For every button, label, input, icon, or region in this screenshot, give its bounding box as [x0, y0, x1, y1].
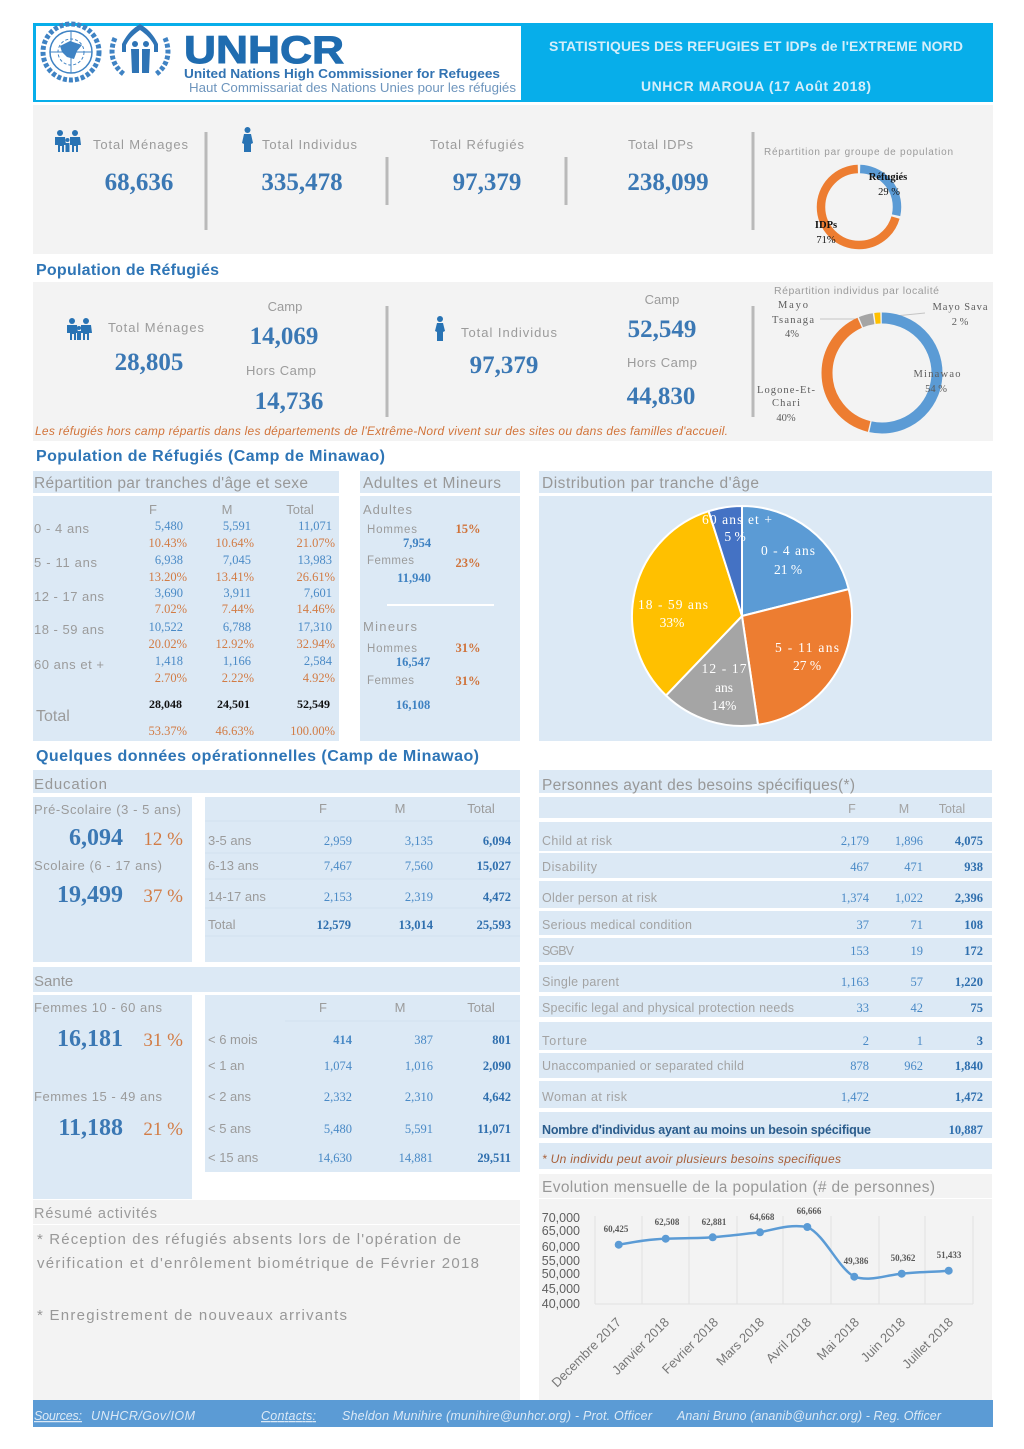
panel: adults and minors: 16,547 — [396, 655, 430, 669]
table: education by age: 13,014 — [399, 918, 434, 932]
table: children by age: 14,630 — [318, 1151, 352, 1165]
row: 60 and over: 2.22% — [222, 671, 254, 685]
row: 5-11 years: 26.61% — [296, 570, 335, 584]
panel: adults and minors: 31% — [456, 674, 480, 688]
table: children by age: 1,016 — [405, 1059, 433, 1073]
table rows: needs by type: 962 — [904, 1059, 923, 1073]
table: children by age: M — [395, 1000, 405, 1015]
panel: education: Education — [34, 776, 107, 793]
data labels: 62,508 — [655, 1217, 680, 1227]
data labels: 60,425 — [604, 1224, 629, 1234]
donut chart: population groups: IDPs — [815, 220, 837, 231]
row: 18-59 years: 18 - 59 ans — [34, 622, 104, 637]
stat: total households: Total Ménages — [93, 137, 188, 152]
data labels — [604, 1206, 962, 1266]
pie chart — [632, 506, 852, 726]
table rows: needs by type: 57 — [910, 975, 923, 989]
donut chart: by locality: 2 % — [952, 317, 969, 328]
data labels: 49,386 — [844, 1256, 869, 1266]
row: total: 53.37% — [148, 724, 187, 738]
table rows: needs by type: Torture — [542, 1034, 587, 1048]
row: 0-4 years: 10.43% — [148, 536, 187, 550]
y axis labels: 65,000 — [542, 1224, 580, 1238]
footer: sources and contacts: Anani Bruno (ananib@unhcr.org) - Reg. Officer — [676, 1409, 942, 1423]
icon: household — [67, 318, 92, 340]
panel: adults and minors: Mineurs — [363, 619, 418, 634]
table rows: needs by type: Disability — [542, 860, 598, 874]
table: children by age: 2,090 — [483, 1059, 511, 1073]
donut chart: by locality — [757, 285, 988, 428]
table rows: needs by type: Specific legal and physical protection needs — [542, 1001, 794, 1015]
stat: women 15-49: 21 % — [143, 1119, 183, 1140]
row: 0-4 years: 0 - 4 ans — [34, 521, 90, 536]
table: education by age: 4,472 — [483, 890, 511, 904]
data labels: 64,668 — [750, 1212, 775, 1222]
table rows: needs by type: 1,472 — [841, 1090, 869, 1104]
panel: age distribution pie: 18 - 59 ans — [638, 597, 708, 612]
table: children by age: < 2 ans — [208, 1089, 252, 1104]
header banner — [33, 23, 993, 102]
logo wordmark — [184, 29, 516, 95]
panel: activities summary: Résumé activités — [34, 1206, 157, 1222]
table rows: needs by type: 108 — [964, 918, 983, 932]
donut chart: population groups — [764, 147, 953, 246]
table: education by age: 6-13 ans — [208, 858, 259, 873]
donut chart: population groups: 29 % — [878, 187, 900, 198]
table rows: needs by type: 2,179 — [841, 834, 869, 848]
row: 18-59 years: 6,788 — [223, 620, 251, 634]
stat: total individuals: Total Individus — [262, 137, 358, 152]
donut chart: by locality: Répartition individus par localité — [774, 285, 939, 297]
row: total: 28,048 — [149, 697, 182, 711]
donut chart: population groups: 71% — [816, 235, 836, 246]
row: 0-4 years: 5,480 — [155, 519, 183, 533]
x axis labels: Decembre 2017 — [548, 1315, 624, 1390]
stat: refugee households: 14,069 — [250, 323, 318, 350]
panel: adults and minors: Adultes et Mineurs — [363, 475, 501, 492]
x axis labels — [548, 1315, 956, 1390]
table rows: needs by type: 42 — [910, 1001, 923, 1015]
row: 5-11 years: 5 - 11 ans — [34, 555, 98, 570]
table: children by age: Total — [467, 1000, 495, 1015]
table rows: needs by type: 1 — [917, 1034, 923, 1048]
panel: age distribution pie: 21 % — [774, 562, 802, 577]
table rows: needs by type: Single parent — [542, 975, 620, 989]
panel: activities summary — [33, 1200, 520, 1400]
donut chart: by locality: Mayo — [778, 300, 808, 311]
table rows: needs by type: 467 — [850, 860, 869, 874]
x axis labels: Juillet 2018 — [899, 1315, 956, 1372]
row: 60 and over: 4.92% — [303, 671, 335, 685]
row: 5-11 years: 7,045 — [223, 553, 251, 567]
row: total: 100.00% — [290, 724, 335, 738]
stat: school age: Scolaire (6 - 17 ans) — [34, 858, 162, 873]
data line — [615, 1223, 953, 1281]
panel: adults and minors: Adultes — [363, 502, 412, 517]
panel: age and sex table — [33, 471, 339, 741]
data labels: 51,433 — [937, 1250, 962, 1260]
stat: pre-school: Pré-Scolaire (3 - 5 ans) — [34, 802, 181, 817]
panel: age and sex table: M — [222, 502, 232, 517]
panel: age distribution pie: ans — [715, 680, 733, 695]
panel: adults and minors: 11,940 — [397, 571, 431, 585]
table: education by age: Total — [208, 917, 236, 932]
donut chart: by locality: Mayo Sava — [932, 302, 988, 313]
panel: age distribution pie: 14% — [712, 698, 736, 713]
donut chart: by locality: Minawao — [914, 369, 960, 380]
panel: age distribution pie: 5 % — [724, 529, 746, 544]
x axis labels: Mars 2018 — [713, 1315, 767, 1369]
data labels: 66,666 — [797, 1206, 822, 1216]
note: out-of-camp refugees: Les réfugiés hors camp répartis dans les départements de l'Extrême-Nord vivent sur des sites ou dans des familles d'accueil. — [35, 424, 728, 438]
donut chart: by locality: Chari — [772, 398, 800, 409]
table: children by age: < 15 ans — [208, 1150, 259, 1165]
icon: person — [435, 316, 445, 341]
stat: refugee households: Camp — [268, 299, 302, 314]
table: children by age: 11,071 — [477, 1122, 511, 1136]
stat: refugee individuals: Camp — [645, 292, 679, 307]
row: 0-4 years: 11,071 — [298, 519, 332, 533]
table rows: needs by type: 878 — [850, 1059, 869, 1073]
panel: activities summary: * Enregistrement de nouveaux arrivants — [37, 1307, 347, 1324]
panel: age distribution pie — [539, 471, 992, 741]
panel: monthly population line chart — [539, 1174, 992, 1400]
y axis labels: 40,000 — [542, 1297, 580, 1311]
panel: adults and minors — [360, 471, 520, 741]
stat: total IDPs — [627, 137, 709, 196]
row: 18-59 years: 20.02% — [148, 637, 187, 651]
row: 60 and over: 2,584 — [304, 654, 333, 668]
stat: women 10-60: 16,181 — [57, 1026, 123, 1052]
table: children by age: F — [319, 1000, 327, 1015]
table: education by age: 3-5 ans — [208, 833, 252, 848]
row: 18-59 years: 10,522 — [149, 620, 183, 634]
row: 12-17 years: 14.46% — [296, 602, 335, 616]
panel: age distribution pie: Distribution par tranche d'âge — [542, 475, 759, 492]
table rows: needs by type: 1,472 — [955, 1090, 983, 1104]
table: education by age: Total — [467, 801, 495, 816]
heading: operational data: Quelques données opérationnelles (Camp de Minawao) — [36, 748, 479, 765]
row: 60 and over: 1,166 — [223, 654, 251, 668]
table rows: needs by type: 172 — [964, 944, 983, 958]
stat: refugee households: Hors Camp — [246, 363, 316, 378]
y axis labels: 60,000 — [542, 1240, 580, 1254]
y axis labels: 55,000 — [542, 1254, 580, 1268]
table rows: needs by type: 2 — [863, 1034, 869, 1048]
header title: STATISTIQUES DES REFUGIES ET IDPs de l'EXTREME NORD — [549, 38, 963, 54]
panel: age distribution pie: 60 ans et + — [702, 512, 772, 527]
row: 18-59 years: 17,310 — [298, 620, 332, 634]
stat: total refugees — [430, 137, 524, 196]
donut chart: by locality: Tsanaga — [772, 315, 814, 326]
row: 18-59 years — [34, 620, 335, 651]
table rows: needs by type: 153 — [850, 944, 869, 958]
row: 18-59 years: 32.94% — [296, 637, 335, 651]
panel: age and sex table: F — [149, 502, 157, 517]
row: total: Total — [36, 708, 70, 725]
x axis labels: Avril 2018 — [763, 1315, 814, 1366]
row: 60 and over: 2.70% — [155, 671, 187, 685]
table rows: needs by type: Older person at risk — [542, 891, 658, 905]
stat: total refugees: 97,379 — [453, 169, 521, 196]
table: education by age: 14-17 ans — [208, 889, 266, 904]
panel: education — [33, 770, 520, 962]
row: 5-11 years: 13.41% — [215, 570, 254, 584]
row: total: 52,549 — [297, 697, 330, 711]
panel: health: Sante — [34, 973, 73, 990]
icon: person — [242, 127, 253, 152]
panel: adults and minors: 16,108 — [396, 698, 430, 712]
stat: women 10-60: 31 % — [143, 1030, 183, 1051]
donut chart: population groups: Réfugiés — [869, 172, 907, 183]
panel: specific needs: M — [899, 802, 909, 816]
stat: refugee individuals: 52,549 — [628, 316, 696, 343]
table: children by age: < 5 ans — [208, 1121, 252, 1136]
row: 60 and over: 60 ans et + — [34, 657, 104, 672]
stat: women 10-60: Femmes 10 - 60 ans — [34, 1000, 162, 1015]
stat: school age: 37 % — [143, 886, 183, 907]
table: education by age: M — [395, 801, 405, 816]
panel: age and sex table: Total — [286, 502, 314, 517]
logo wordmark: Haut Commissariat des Nations Unies pour les réfugiés — [189, 81, 516, 95]
stat: women 15-49: Femmes 15 - 49 ans — [34, 1089, 162, 1104]
x axis labels: Fevrier 2018 — [659, 1315, 721, 1377]
table rows: needs by type: 1,220 — [955, 975, 983, 989]
panel: health — [33, 967, 520, 1199]
table rows: needs by type: 75 — [970, 1001, 983, 1015]
table: children by age: 5,591 — [405, 1122, 433, 1136]
row: 5-11 years — [34, 553, 335, 584]
row: 12-17 years: 3,690 — [155, 586, 183, 600]
table rows: needs by type: 1,840 — [955, 1059, 983, 1073]
table rows: needs by type: 4,075 — [955, 834, 983, 848]
row: 12-17 years: 7.44% — [222, 602, 254, 616]
stat: refugee individuals: Total Individus — [461, 325, 558, 340]
stat: total IDPs: Total IDPs — [628, 137, 694, 152]
row: total — [36, 697, 335, 738]
row: 12-17 years: 7.02% — [155, 602, 187, 616]
stat: total IDPs: 238,099 — [627, 169, 709, 196]
table rows: needs by type: Woman at risk — [542, 1090, 628, 1104]
stat: refugee households — [108, 299, 323, 415]
table rows: needs by type: 1,374 — [841, 891, 870, 905]
table rows: needs by type: 37 — [856, 918, 869, 932]
total row: 10,887 — [949, 1123, 983, 1137]
table: children by age: 4,642 — [483, 1090, 511, 1104]
row: 12-17 years: 7,601 — [304, 586, 332, 600]
logo wordmark: United Nations High Commissioner for Refugees — [184, 67, 500, 81]
panel: adults and minors: Hommes — [367, 524, 417, 536]
panel: age distribution pie: 12 - 17 — [702, 661, 747, 676]
panel: refugee population — [33, 282, 993, 441]
stat: women 15-49 — [34, 1089, 183, 1141]
stat: refugee households: Total Ménages — [108, 320, 204, 335]
donut chart: population groups: Répartition par groupe de population — [764, 147, 953, 158]
panel: adults and minors: Hommes — [367, 643, 417, 655]
header title — [549, 38, 963, 94]
table rows: needs by type: Unaccompanied or separated child — [542, 1059, 744, 1073]
data labels: 62,881 — [702, 1217, 727, 1227]
y axis labels: 50,000 — [542, 1267, 580, 1281]
y axis labels — [542, 1211, 580, 1311]
stat: school age: 19,499 — [57, 882, 123, 908]
row: 12-17 years — [34, 586, 335, 616]
table rows: needs by type: 2,396 — [955, 891, 983, 905]
table rows: needs by type: 1,896 — [895, 834, 923, 848]
table rows: needs by type: 19 — [910, 944, 923, 958]
table rows: needs by type: Child at risk — [542, 834, 613, 848]
footnote: * Un individu peut avoir plusieurs besoins specifiques — [542, 1152, 841, 1166]
total row: Nombre d'individus ayant au moins un besoin spécifique — [542, 1123, 871, 1137]
table: education by age: 7,560 — [405, 859, 433, 873]
table rows: needs by type: 33 — [856, 1001, 869, 1015]
row: 5-11 years: 6,938 — [155, 553, 183, 567]
table rows: needs by type: 1,163 — [841, 975, 869, 989]
table: education by age: 7,467 — [324, 859, 352, 873]
table: education by age: 2,319 — [405, 890, 433, 904]
row: 0-4 years: 10.64% — [215, 536, 254, 550]
panel: adults and minors: 23% — [456, 556, 480, 570]
table: children by age: 801 — [492, 1033, 511, 1047]
donut chart: by locality: Logone-Et- — [757, 385, 816, 396]
stat: total refugees: Total Réfugiés — [430, 137, 524, 152]
footer: sources and contacts: Contacts: — [261, 1409, 316, 1423]
table: education by age: F — [319, 801, 327, 816]
heading: Minawao camp population: Population de Réfugiés (Camp de Minawao) — [36, 448, 385, 465]
x axis labels: Juin 2018 — [858, 1315, 908, 1365]
stat: women 10-60 — [34, 1000, 183, 1052]
stat: total individuals — [261, 137, 358, 196]
table: education by age: 6,094 — [483, 834, 512, 848]
y axis labels: 70,000 — [542, 1211, 580, 1225]
stat: pre-school: 12 % — [143, 829, 183, 850]
table: children by age — [208, 1000, 511, 1165]
table: children by age: 5,480 — [324, 1122, 352, 1136]
table: children by age: 14,881 — [399, 1151, 433, 1165]
row: 0-4 years: 21.07% — [296, 536, 335, 550]
table: education by age — [208, 801, 512, 932]
table rows: needs by type — [542, 834, 983, 1104]
table: education by age: 2,153 — [324, 890, 352, 904]
stat: pre-school — [34, 802, 183, 851]
row: 5-11 years: 13,983 — [298, 553, 332, 567]
panel: monthly population line chart: Evolution mensuelle de la population (# de personnes) — [542, 1179, 935, 1196]
table: education by age: 15,027 — [477, 859, 511, 873]
stat: total households — [93, 137, 188, 196]
heading: refugee population: Population de Réfugiés — [36, 262, 219, 279]
donut chart: by locality: 40% — [776, 413, 796, 424]
x axis labels: Janvier 2018 — [609, 1315, 672, 1378]
stat: pre-school: 6,094 — [69, 825, 123, 851]
x axis labels: Mai 2018 — [814, 1315, 862, 1363]
panel: age and sex table: Répartition par tranches d'âge et sexe — [34, 475, 308, 492]
panel: adults and minors: Femmes — [367, 555, 414, 567]
row: 5-11 years: 13.20% — [148, 570, 187, 584]
panel: specific needs: Total — [939, 802, 965, 816]
stat: refugee individuals: 97,379 — [470, 352, 538, 379]
table: children by age: 29,511 — [477, 1151, 511, 1165]
panel: adults and minors: 31% — [456, 641, 480, 655]
table: children by age: 2,332 — [324, 1090, 352, 1104]
row: total: 24,501 — [217, 697, 250, 711]
panel: age distribution pie: 0 - 4 ans — [761, 543, 815, 558]
table rows: needs by type: 3 — [977, 1034, 983, 1048]
stat: total households: 68,636 — [105, 169, 173, 196]
row: 12-17 years: 3,911 — [223, 586, 251, 600]
stat: women 15-49: 11,188 — [58, 1115, 123, 1141]
table: children by age: 1,074 — [324, 1059, 353, 1073]
header title: UNHCR MAROUA (17 Août 2018) — [641, 78, 871, 94]
panel: age distribution pie: 27 % — [793, 658, 821, 673]
row: total: 46.63% — [215, 724, 254, 738]
panel: age distribution pie: 33% — [660, 615, 684, 630]
icon: UN emblem — [43, 24, 99, 80]
panel: age distribution pie: 5 - 11 ans — [775, 640, 839, 655]
row: 60 and over: 1,418 — [155, 654, 183, 668]
panel: adults and minors: Femmes — [367, 675, 414, 687]
stat: refugee households: 14,736 — [255, 388, 323, 415]
table: children by age: < 6 mois — [208, 1032, 258, 1047]
panel: activities summary: vérification et d'enrôlement biométrique de Février 2018 — [37, 1255, 479, 1272]
panel: specific needs — [539, 770, 992, 1169]
table: education by age: 12,579 — [317, 918, 351, 932]
row: 12-17 years: 12 - 17 ans — [34, 589, 104, 604]
table rows: needs by type: 71 — [910, 918, 923, 932]
row: 60 and over — [34, 654, 335, 685]
panel: activities summary: * Réception des réfugiés absents lors de l'opération de — [37, 1231, 461, 1248]
row: 0-4 years — [34, 519, 335, 550]
y axis labels: 45,000 — [542, 1282, 580, 1296]
icon: UNHCR emblem — [112, 24, 168, 75]
footer: sources and contacts: UNHCR/Gov/IOM — [91, 1409, 196, 1423]
table rows: needs by type: Serious medical condition — [542, 918, 692, 932]
table: children by age: 2,310 — [405, 1090, 433, 1104]
panel: global totals — [33, 105, 993, 254]
table: children by age: 387 — [414, 1033, 433, 1047]
panel: specific needs: F — [848, 802, 856, 816]
table: education by age: 2,959 — [324, 834, 352, 848]
donut chart: by locality: 54 % — [925, 384, 947, 395]
stat: refugee individuals: 44,830 — [627, 383, 695, 410]
table: education by age: 3,135 — [405, 834, 433, 848]
stat: total individuals: 335,478 — [261, 169, 343, 196]
footer: sources and contacts — [33, 1400, 993, 1427]
table: education by age: 25,593 — [477, 918, 511, 932]
icon: household — [55, 130, 81, 152]
panel: specific needs: Personnes ayant des besoins spécifiques(*) — [542, 777, 855, 794]
data labels: 50,362 — [891, 1253, 916, 1263]
stat: refugee households: 28,805 — [115, 349, 183, 376]
table rows: needs by type: 938 — [964, 860, 983, 874]
stat: refugee individuals — [461, 292, 697, 410]
stat: school age — [34, 858, 183, 908]
row: 18-59 years: 12.92% — [215, 637, 254, 651]
panel: adults and minors: 15% — [456, 522, 480, 536]
logo wordmark: UNHCR — [184, 29, 344, 72]
table rows: needs by type: SGBV — [542, 944, 575, 958]
donut chart: by locality: 4% — [785, 329, 799, 340]
footer: sources and contacts: Sources: — [34, 1409, 82, 1423]
table rows: needs by type: 471 — [904, 860, 923, 874]
table: children by age: < 1 an — [208, 1058, 245, 1073]
table rows: needs by type: 1,022 — [895, 891, 923, 905]
panel: adults and minors: 7,954 — [403, 536, 432, 550]
stat: refugee individuals: Hors Camp — [627, 355, 697, 370]
table: children by age: 414 — [333, 1033, 353, 1047]
row: 0-4 years: 5,591 — [223, 519, 251, 533]
footer: sources and contacts: Sheldon Munihire (munihire@unhcr.org) - Prot. Officer — [342, 1409, 653, 1423]
